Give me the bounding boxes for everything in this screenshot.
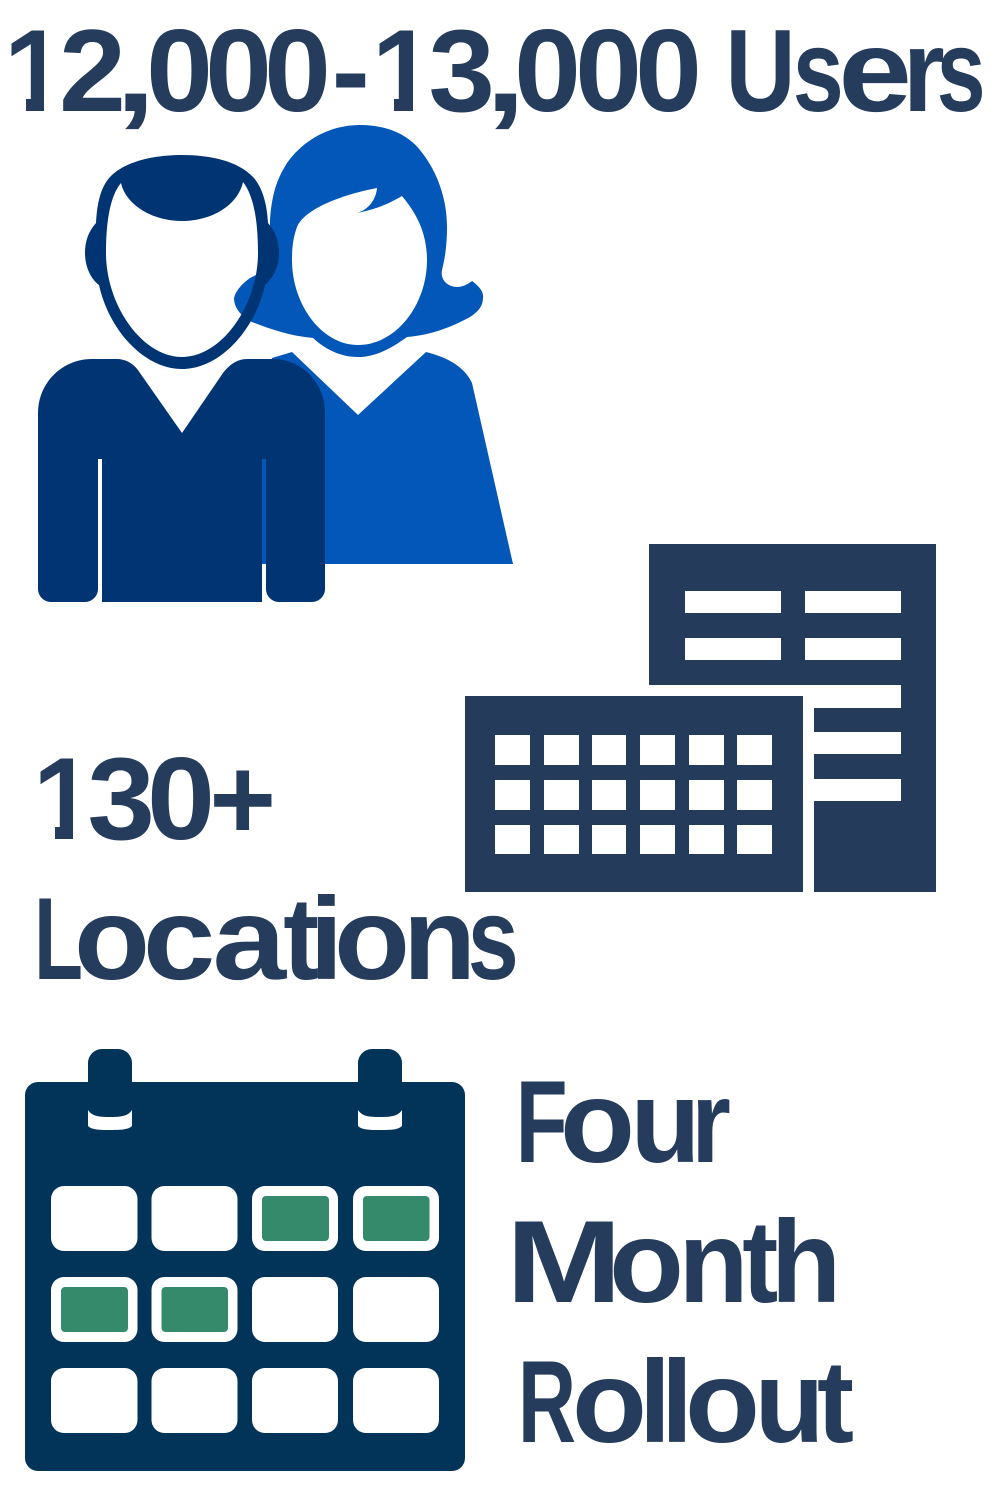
label: Locations: o — [334, 873, 410, 1004]
title: 12,000-13,000 Users: 0 — [264, 5, 331, 136]
stat: 130+ — [40, 757, 272, 840]
label: Locations: s — [468, 873, 519, 1004]
calendar binding rings — [88, 1049, 402, 1130]
label: Four Month Rollout: t — [817, 1336, 854, 1467]
calendar day cells — [51, 1186, 439, 1433]
label: Four Month Rollout: r — [691, 1056, 731, 1187]
label: Four Month Rollout: o — [609, 1196, 684, 1327]
title: 12,000-13,000 Users: , — [115, 5, 156, 136]
title: 12,000-13,000 Users — [12, 29, 982, 130]
label: Four Month Rollout: o — [560, 1056, 635, 1187]
label: Locations: n — [403, 873, 476, 1004]
title: 12,000-13,000 Users: , — [485, 5, 526, 136]
label: Locations: t — [283, 873, 319, 1004]
label: Locations: L — [34, 873, 83, 1004]
label: Locations: a — [212, 873, 287, 1004]
title: 12,000-13,000 Users: 1 — [372, 5, 437, 136]
label: Four Month Rollout: h — [771, 1196, 841, 1327]
label: Four Month Rollout: F — [516, 1056, 568, 1187]
label: Four Month Rollout: M — [506, 1196, 622, 1327]
title: 12,000-13,000 Users: 3 — [428, 5, 495, 136]
icon: calendar — [25, 1049, 465, 1471]
icon: two users — [38, 125, 513, 602]
label: Locations — [34, 873, 519, 1004]
label: Four Month Rollout: R — [518, 1336, 576, 1467]
title: 12,000-13,000 Users: - — [332, 5, 370, 136]
title: 12,000-13,000 Users: 0 — [146, 5, 213, 136]
label: Four Month Rollout: u — [630, 1056, 700, 1187]
label: Locations: c — [143, 873, 215, 1004]
title: 12,000-13,000 Users: 0 — [575, 5, 642, 136]
label: Four Month Rollout: l — [661, 1336, 693, 1467]
label: Four Month Rollout: o — [572, 1336, 647, 1467]
label: Four Month Rollout: n — [678, 1196, 748, 1327]
title: 12,000-13,000 Users: s — [937, 5, 986, 136]
label: Four Month Rollout: l — [639, 1336, 671, 1467]
label: Locations: i — [310, 873, 343, 1004]
stat: 130+: 0 — [147, 733, 215, 864]
title: 12,000-13,000 Users: s — [793, 5, 844, 136]
stat: 130+: 1 — [32, 733, 98, 864]
title: 12,000-13,000 Users: 1 — [4, 5, 69, 136]
icon: man user — [38, 155, 325, 602]
title: 12,000-13,000 Users: e — [838, 5, 912, 136]
title: 12,000-13,000 Users: 0 — [635, 5, 702, 136]
title: 12,000-13,000 Users: r — [903, 5, 945, 136]
label: Four Month Rollout: u — [754, 1336, 824, 1467]
title: 12,000-13,000 Users: U — [726, 5, 796, 136]
calendar highlighted days — [61, 1196, 430, 1332]
title: 12,000-13,000 Users: 2 — [59, 5, 126, 136]
title: 12,000-13,000 Users: 0 — [514, 5, 581, 136]
icon: woman user — [234, 125, 513, 564]
label: Four Month Rollout: o — [685, 1336, 760, 1467]
stat: 130+: + — [209, 733, 276, 864]
label: Four Month Rollout — [506, 1056, 854, 1467]
stat: 130+: 3 — [87, 733, 155, 864]
icon: office buildings — [465, 544, 936, 892]
label: Locations: o — [74, 873, 150, 1004]
label: Four Month Rollout: t — [742, 1196, 778, 1327]
title: 12,000-13,000 Users: 0 — [205, 5, 272, 136]
